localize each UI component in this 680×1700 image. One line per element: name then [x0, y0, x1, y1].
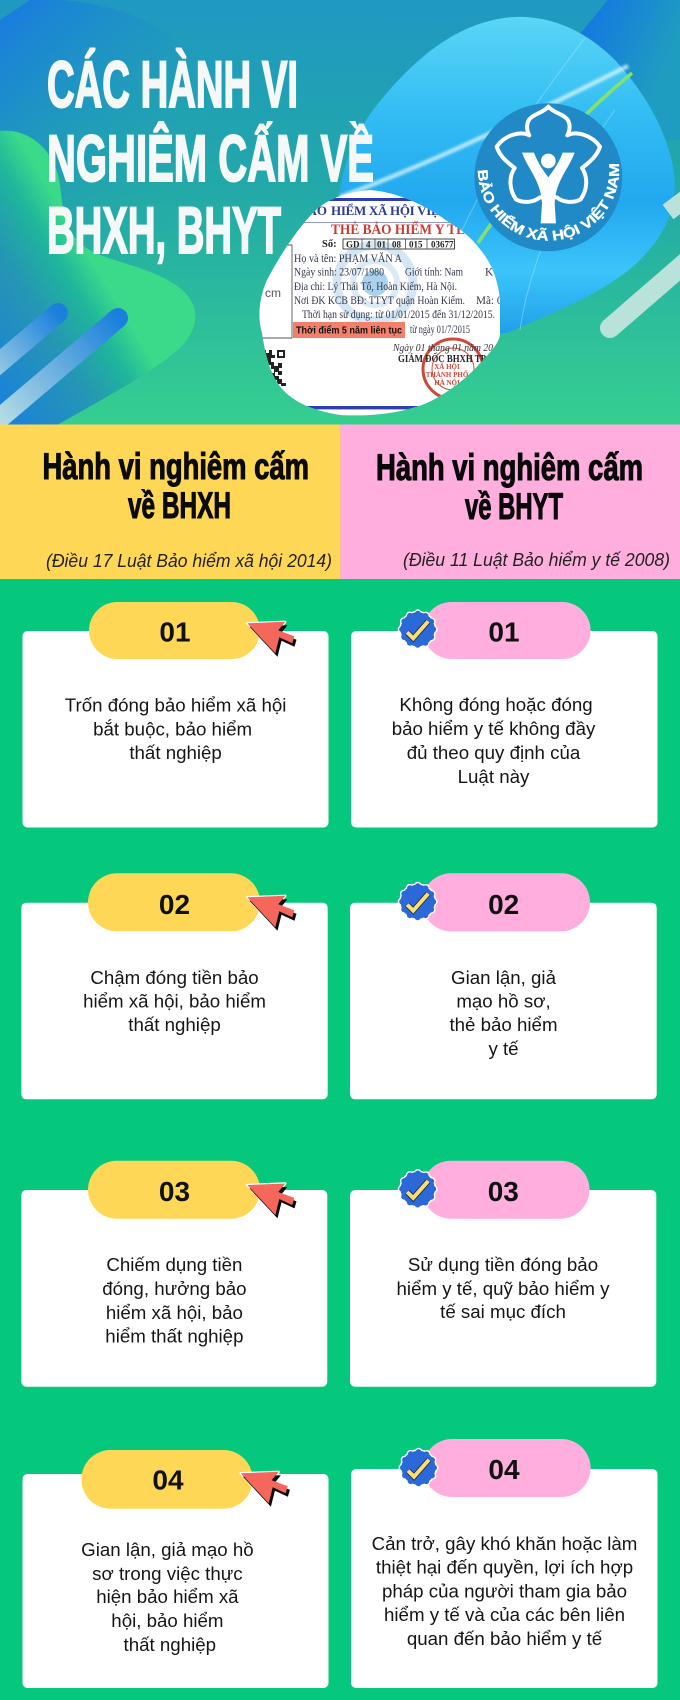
image: health insurance card: 4	[366, 240, 371, 250]
card: BHYT 03	[350, 1161, 656, 1387]
image: health insurance card	[258, 190, 503, 415]
image: health insurance card: Địa chỉ: Lý Thái Tổ, Hoàn Kiếm, Hà Nội.	[294, 281, 457, 293]
card: BHXH 02: hiểm xã hội, bảo hiểm	[83, 991, 266, 1012]
image: health insurance card: cm	[265, 286, 281, 300]
image: health insurance card: 08	[392, 240, 402, 250]
image: health insurance card: XÃ HỘI	[434, 363, 460, 371]
panel: hero banner	[0, 0, 680, 435]
card: BHYT 02: mạo hồ sơ,	[456, 991, 551, 1012]
card: BHYT 04: pháp của người tham gia bảo	[382, 1580, 627, 1602]
card: BHYT 03: Sử dụng tiền đóng bảo	[408, 1254, 598, 1275]
card: BHYT 04	[351, 1439, 658, 1688]
image: health insurance card: Ngày sinh: 23/07/1980	[294, 266, 384, 278]
card: BHXH 03	[21, 1161, 327, 1387]
card: BHYT 01: bảo hiểm y tế không đầy	[392, 718, 596, 739]
card: BHXH 03: hiểm xã hội, bảo	[106, 1302, 243, 1323]
image: health insurance card: Nơi ĐK KCB BĐ: TTYT quận Hoàn Kiếm.	[294, 295, 465, 307]
title: BHXH, BHYT	[47, 193, 281, 267]
card: BHYT 01: 01	[488, 616, 520, 648]
image: health insurance card: GIÁM ĐỐC BHXH TP	[398, 352, 486, 365]
image: health insurance card: GD	[346, 240, 360, 250]
card: BHXH 04	[22, 1450, 328, 1688]
image: health insurance card: Số:	[322, 239, 337, 250]
card: BHYT 02: 02	[488, 889, 519, 920]
title: CÁC HÀNH VI	[47, 47, 298, 121]
panel: BHXH header: Hành vi nghiêm cấm	[42, 446, 309, 487]
image: health insurance card: THÀNH PHỐ	[426, 371, 469, 379]
card: BHXH 01: Trốn đóng bảo hiểm xã hội	[65, 694, 286, 716]
image: health insurance card: HÀ NỘI	[434, 379, 460, 387]
card: BHYT 02: y tế	[488, 1038, 519, 1059]
image: health insurance card: BẢO	[299, 203, 327, 218]
card: BHYT 02	[350, 873, 657, 1099]
card: BHYT 04: quan đến bảo hiểm y tế	[407, 1628, 603, 1649]
card: BHXH 03: hiểm thất nghiệp	[105, 1326, 243, 1347]
image: health insurance card: 03677	[431, 240, 454, 250]
card: BHXH 01: thất nghiệp	[129, 742, 222, 763]
card: BHYT 03: hiểm y tế, quỹ bảo hiểm y	[397, 1278, 610, 1299]
card: BHYT 01: đủ theo quy định của	[407, 742, 581, 763]
card: BHXH 04: 04	[152, 1464, 184, 1496]
title: NGHIÊM CẤM VỀ	[47, 121, 374, 195]
card: BHYT 02: thẻ bảo hiểm	[449, 1014, 558, 1035]
image: health insurance card: 01	[377, 240, 386, 250]
card: BHYT 01: Luật này	[458, 766, 530, 787]
panel: BHYT header	[340, 424, 680, 579]
card: BHXH 02	[21, 873, 328, 1099]
card: BHXH 04: hội, bảo hiểm	[111, 1610, 224, 1631]
card: BHYT 03: tế sai mục đích	[440, 1301, 566, 1322]
card: BHXH 02: 02	[159, 889, 190, 920]
card: BHYT 04: thiệt hại đến quyền, lợi ích hợp	[376, 1556, 633, 1578]
card: BHYT 04: 04	[488, 1454, 520, 1485]
card: BHXH 03: đóng, hưởng bảo	[102, 1278, 247, 1299]
image: health insurance card: K	[485, 266, 493, 278]
card: BHXH 04: thất nghiệp	[124, 1634, 216, 1655]
image: health insurance card: 015	[409, 240, 423, 250]
panel: BHYT header: (Điều 11 Luật Bảo hiểm y tế 2008)	[403, 550, 670, 570]
panel: BHXH header: về BHXH	[128, 485, 231, 526]
card: BHXH 03: 03	[159, 1176, 190, 1207]
card: BHXH 01: 01	[159, 616, 191, 648]
card: BHXH 04: Gian lận, giả mạo hồ	[81, 1539, 254, 1560]
card: BHYT 03: 03	[488, 1176, 519, 1207]
icon: social insurance logo	[474, 103, 622, 252]
card: BHYT 04: Cản trở, gây khó khăn hoặc làm	[372, 1533, 637, 1554]
panel: BHXH header: (Điều 17 Luật Bảo hiểm xã hội 2014)	[46, 551, 332, 571]
image: health insurance card: từ ngày 01/7/2015	[410, 324, 470, 336]
image: health insurance card: Thời điểm 5 năm liên tục	[296, 324, 402, 336]
card: BHXH 01: bắt buộc, bảo hiểm	[93, 718, 252, 740]
card: BHXH 04: hiện bảo hiểm xã	[96, 1586, 239, 1607]
panel: BHYT header: về BHYT	[465, 486, 563, 527]
card: BHXH 03: Chiếm dụng tiền	[106, 1254, 242, 1275]
image: health insurance card: Ngày 01 tháng 01 năm 20	[392, 342, 493, 354]
card: BHXH 02: thất nghiệp	[128, 1014, 221, 1035]
card: BHYT 01	[351, 602, 658, 828]
title	[47, 47, 374, 267]
image: health insurance card: Thời hạn sử dụng: từ 01/01/2015 đến 31/12/2015.	[302, 309, 495, 321]
image: health insurance card: Mã: 0	[476, 295, 503, 307]
image: health insurance card: THẺ BẢO HIỂM Y TẾ	[331, 220, 465, 238]
card: BHXH 01	[22, 602, 328, 828]
card: BHYT 04: hiểm y tế và của các bên liên	[384, 1604, 625, 1625]
card: BHYT 01: Không đóng hoặc đóng	[399, 694, 593, 715]
card: BHXH 04: sơ trong việc thực	[92, 1563, 243, 1584]
card: BHXH 02: Chậm đóng tiền bảo	[90, 967, 259, 988]
icon: social insurance logo: BẢO HIỂM XÃ HỘI VIỆT NAM	[478, 164, 620, 241]
image: health insurance card: Giới tính: Nam	[405, 266, 463, 278]
panel: BHXH header	[0, 424, 340, 579]
image: health insurance card: HIỂM XÃ HỘI VIỆT	[331, 203, 448, 218]
card: BHYT 02: Gian lận, giả	[451, 967, 557, 988]
image: health insurance card: Họ và tên: PHẠM VĂN A	[294, 253, 402, 265]
